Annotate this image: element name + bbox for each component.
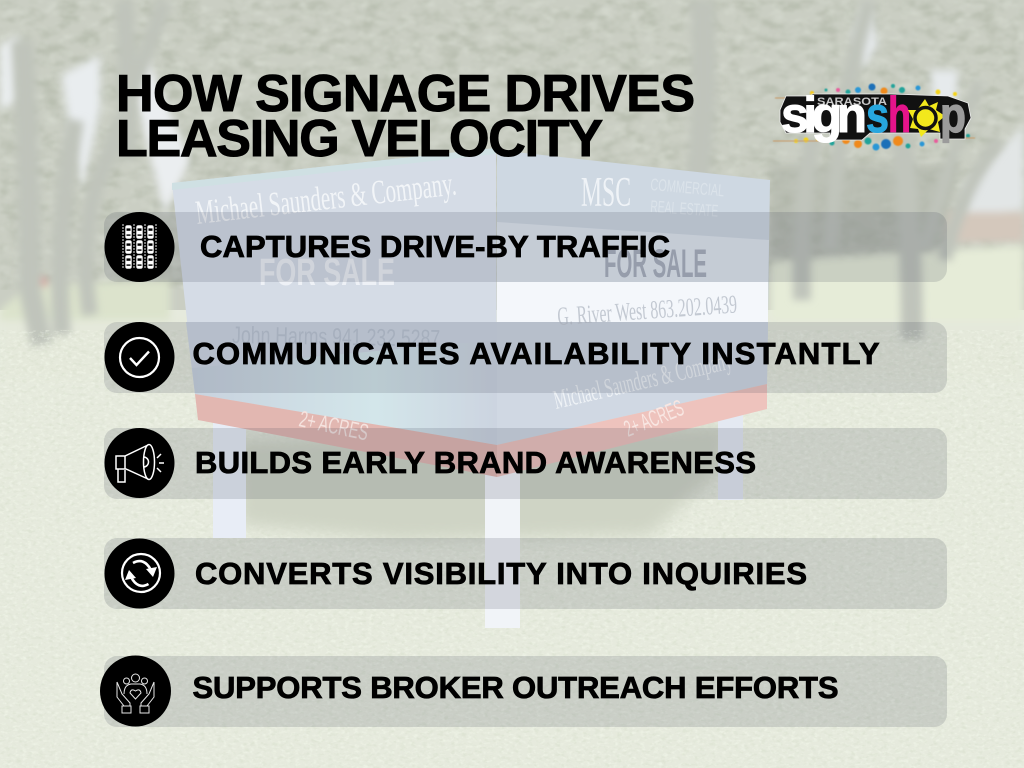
photo sign left face: Michael Saunders & Company.: [194, 166, 458, 232]
title: [116, 65, 695, 168]
photo sign right face: COMMERCIAL: [650, 175, 725, 200]
row 3 bar: [104, 428, 947, 499]
photo sign left face: FOR SALE: [259, 252, 395, 294]
row 3 label: BUILDS EARLY BRAND AWARENESS: [195, 445, 756, 480]
photo lawn start: [0, 245, 1024, 380]
row 1 bar: [104, 212, 947, 282]
logo paint splatter: [773, 84, 975, 150]
icon: megaphone: [104, 428, 174, 498]
photo sign right face: Michael Saunders & Company: [551, 345, 735, 415]
icon: check mark: [104, 322, 174, 392]
photo lawn texture: [0, 330, 1024, 768]
row 4 label: CONVERTS VISIBILITY INTO INQUIRIES: [195, 556, 807, 591]
list row 5: supports broker outreach efforts: [100, 656, 947, 727]
title: HOW SIGNAGE DRIVES: [116, 65, 695, 123]
row 5 label: SUPPORTS BROKER OUTREACH EFFORTS: [192, 670, 838, 705]
row 5 bar: [104, 656, 947, 727]
logo black backing: [780, 94, 971, 140]
logo wordmark: p: [940, 87, 966, 143]
row 2 bar: [104, 322, 947, 393]
logo wordmark: SARASOTA: [817, 96, 887, 108]
photo sign right face: REAL ESTATE: [650, 197, 719, 221]
icon: parking lot cars: [104, 212, 174, 282]
logo wordmark: s: [866, 87, 889, 143]
list row 2: communicates availability instantly: [104, 322, 947, 393]
logo wordmark: sign: [781, 87, 867, 143]
icon: refresh arrows: [104, 538, 174, 608]
photo shade under sign: [235, 425, 730, 540]
logo wordmark: h: [888, 87, 911, 143]
row 2 label: COMMUNICATES AVAILABILITY INSTANTLY: [192, 336, 880, 371]
photo sign left face: John Harms 941.232.5287: [232, 322, 440, 353]
photo sign right face: FOR SALE: [604, 242, 707, 286]
icon: hands holding people: [100, 656, 171, 726]
row 4 bar: [104, 538, 947, 609]
list row 1: captures drive-by traffic: [104, 212, 947, 282]
photo sign left face: 2+ ACRES: [297, 405, 371, 445]
row 1 label: CAPTURES DRIVE-BY TRAFFIC: [200, 229, 670, 264]
photo palm trunks: [22, 0, 1000, 345]
logo: Sarasota Sign Shop: [773, 84, 975, 150]
photo sign right face: [497, 150, 770, 477]
list row 3: builds early brand awareness: [104, 428, 947, 499]
photo sign left face: [172, 148, 497, 477]
title: LEASING VELOCITY: [116, 110, 603, 168]
logo wordmark: [781, 87, 966, 143]
logo wordmark: o: [913, 87, 938, 143]
photo sign right face: MSC: [581, 170, 631, 216]
photo sign right face: G. River West 863.202.0439: [556, 289, 738, 331]
list row 4: converts visibility into inquiries: [104, 538, 947, 609]
photo sign right face: 2+ ACRES: [620, 394, 687, 442]
photo sign posts: [213, 400, 743, 628]
